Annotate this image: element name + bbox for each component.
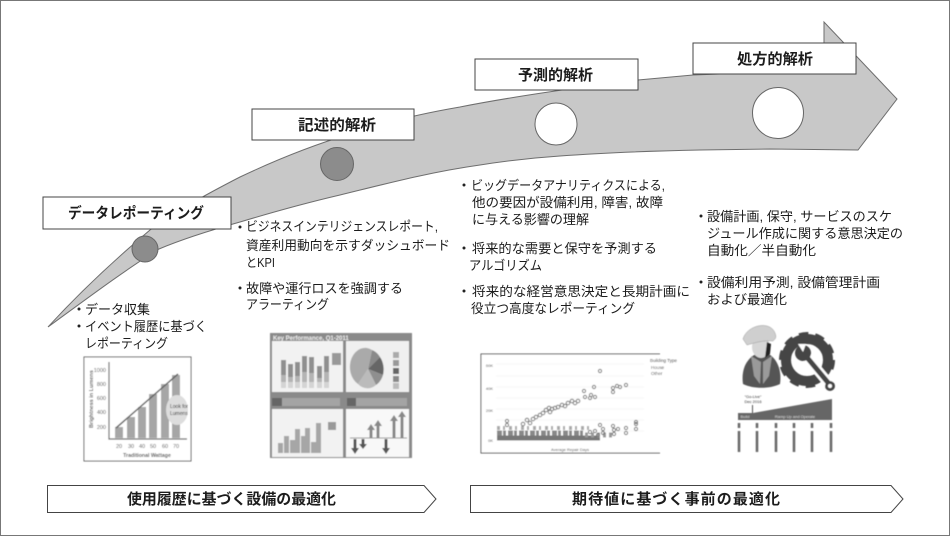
text block: data reporting: イベント履歴に基づく bbox=[85, 319, 207, 334]
text block: data reporting: レポーティング bbox=[85, 336, 168, 351]
text block: descriptive analytics: アラーティング bbox=[246, 297, 329, 312]
bar chart thumbnail: 60 bbox=[162, 444, 168, 450]
bar chart thumbnail bbox=[84, 357, 191, 461]
text block: prescriptive analytics: 設備計画, 保守, サービスのスケ bbox=[707, 209, 892, 224]
scatter plot thumbnail: 60K bbox=[486, 363, 493, 368]
scatter plot thumbnail: Building Type bbox=[650, 358, 677, 363]
milestone circle: descriptive bbox=[320, 148, 354, 180]
heading: data reporting: データレポーティング bbox=[68, 204, 204, 222]
scatter plot thumbnail: Other bbox=[651, 371, 663, 376]
scatter plot thumbnail: Average Repair Days bbox=[551, 447, 589, 452]
heading: prescriptive analytics bbox=[693, 43, 856, 74]
text block: prescriptive analytics: および最適化 bbox=[707, 292, 787, 307]
heading: descriptive analytics bbox=[252, 109, 414, 140]
text block: descriptive analytics: 資産利用動向を示すダッシュボード bbox=[246, 238, 450, 253]
bar chart thumbnail: Lumens bbox=[170, 411, 188, 417]
text block: descriptive analytics: ビジネスインテリジェンスレポート, bbox=[246, 219, 438, 234]
heading: descriptive analytics: 記述的解析 bbox=[298, 116, 376, 134]
bar chart thumbnail: Traditional Wattage bbox=[123, 453, 171, 459]
bar chart thumbnail: 50 bbox=[150, 444, 156, 450]
timeline wedge: Dec 2016 bbox=[744, 399, 762, 404]
heading: prescriptive analytics: 処方的解析 bbox=[737, 50, 813, 68]
bar chart thumbnail: 400 bbox=[97, 410, 106, 416]
text block: descriptive analytics: とKPI bbox=[246, 255, 275, 270]
text block: prescriptive analytics bbox=[700, 209, 903, 307]
footer arrow: usage history: 使用履歴に基づく設備の最適化 bbox=[127, 490, 336, 508]
footer arrow: usage history bbox=[48, 486, 436, 512]
text block: predictive analytics bbox=[462, 177, 690, 316]
text block: prescriptive analytics: ジュール作成に関する意思決定の bbox=[707, 226, 903, 241]
timeline wedge: Ramp Up and Operate bbox=[775, 414, 816, 419]
milestone circle: data reporting bbox=[132, 236, 158, 262]
text block: predictive analytics: に与える影響の理解 bbox=[472, 212, 589, 227]
timeline wedge: "Go-Live" bbox=[745, 394, 762, 399]
scatter plot thumbnail: 40K bbox=[486, 386, 493, 391]
text block: prescriptive analytics: 自動化／半自動化 bbox=[707, 243, 816, 258]
footer arrow: expected value bbox=[470, 486, 903, 512]
bar chart thumbnail: 600 bbox=[97, 396, 106, 402]
dashboard thumbnail bbox=[270, 333, 412, 458]
bar chart thumbnail: 800 bbox=[97, 382, 106, 388]
text block: descriptive analytics: 故障や運行ロスを強調する bbox=[246, 281, 403, 296]
bar chart thumbnail: 20 bbox=[116, 444, 122, 450]
bar chart thumbnail: Brightness in Lumens bbox=[89, 370, 95, 428]
timeline wedge bbox=[738, 394, 832, 452]
bar chart thumbnail: 40 bbox=[139, 444, 145, 450]
main curved arrow bbox=[48, 22, 897, 327]
icon: worker with gear and wrench bbox=[738, 325, 835, 452]
timeline wedge: Build bbox=[741, 414, 749, 419]
text block: predictive analytics: 将来的な需要と保守を予測する bbox=[472, 241, 657, 256]
text block: data reporting: データ収集 bbox=[85, 301, 150, 317]
scatter plot thumbnail: 20K bbox=[486, 408, 493, 413]
scatter plot thumbnail bbox=[481, 354, 677, 453]
icon: gear with wrench bbox=[782, 335, 835, 391]
footer arrow: expected value: 期待値に基づく事前の最適化 bbox=[572, 490, 780, 508]
bar chart thumbnail: 30 bbox=[128, 444, 134, 450]
text block: prescriptive analytics: 設備利用予測, 設備管理計画 bbox=[707, 275, 880, 290]
text block: descriptive analytics bbox=[238, 219, 450, 312]
heading: predictive analytics: 予測的解析 bbox=[518, 66, 593, 84]
bar chart thumbnail: 200 bbox=[97, 425, 106, 431]
bar chart thumbnail: Look for bbox=[170, 404, 188, 410]
dashboard thumbnail: Key Performance, Q1-2011 bbox=[273, 336, 349, 342]
milestone circle: predictive bbox=[535, 103, 577, 145]
heading: predictive analytics bbox=[475, 59, 638, 90]
milestone circle: prescriptive bbox=[752, 88, 804, 138]
text block: data reporting bbox=[78, 301, 207, 351]
text block: predictive analytics: 他の要因が設備利用, 障害, 故障 bbox=[472, 195, 663, 210]
heading: data reporting bbox=[43, 197, 231, 229]
text block: predictive analytics: アルゴリズム bbox=[469, 257, 542, 273]
scatter plot thumbnail: 0K bbox=[488, 438, 493, 443]
bar chart thumbnail: 1000 bbox=[94, 368, 106, 374]
icon: worker bbox=[743, 325, 780, 388]
text block: predictive analytics: ビッグデータアナリティクスによる, bbox=[471, 177, 665, 193]
bar chart thumbnail: 70 bbox=[173, 444, 179, 450]
text block: predictive analytics: 将来的な経営意思決定と長期計画に bbox=[472, 284, 690, 299]
scatter plot thumbnail: House bbox=[651, 365, 665, 370]
text block: predictive analytics: 役立つ高度なレポーティング bbox=[471, 300, 635, 316]
